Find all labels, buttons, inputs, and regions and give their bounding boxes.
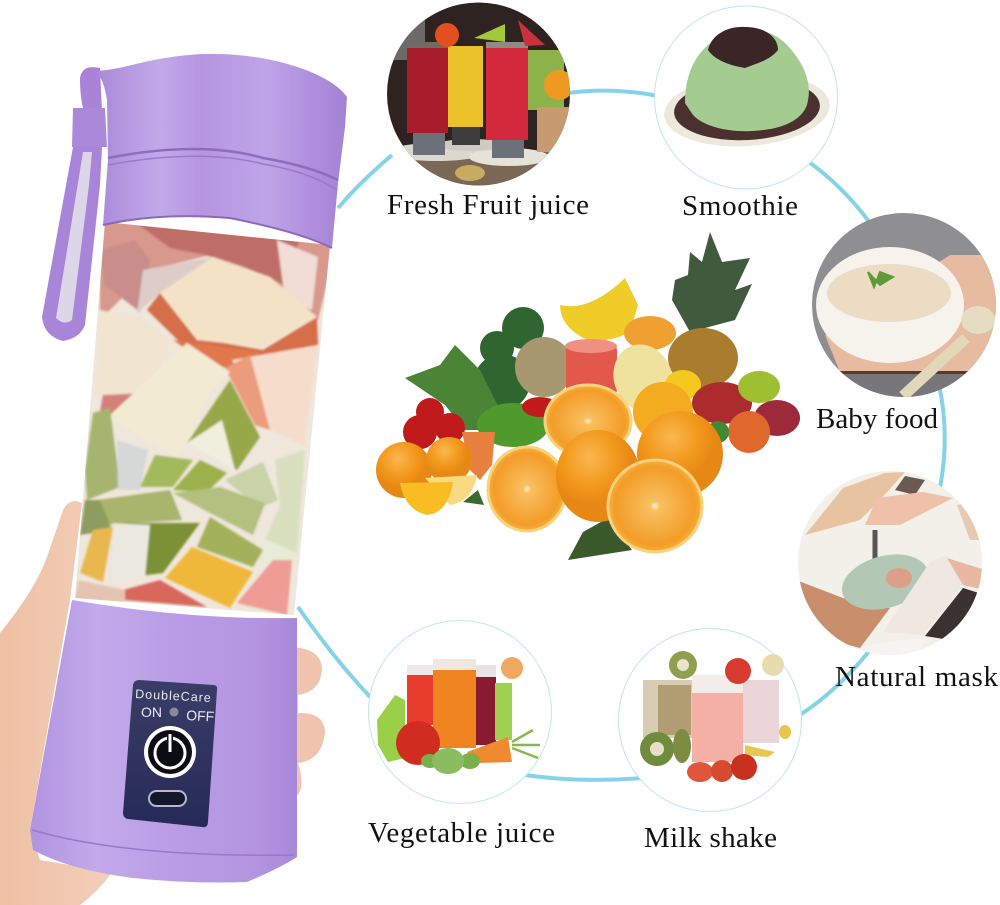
off label: OFF [186,707,215,724]
back orange [633,382,693,442]
green apple [738,371,780,403]
half orange front [608,460,702,552]
photo: baby food [810,210,1000,400]
photo: vegetable juice [368,620,552,804]
grapes [754,400,800,436]
leaf [568,518,632,560]
pineapple [668,232,752,388]
kale [474,307,544,410]
photo: smoothie [654,6,838,189]
icon: usb-c port [149,791,186,806]
hand holding the blender [0,501,325,905]
lime [707,421,729,443]
indicator light [170,708,178,716]
brand label: DoubleCare [135,687,212,705]
carrot greens [405,345,500,430]
strap loop [42,67,107,341]
label: vegetable juice: Vegetable juice [368,817,555,849]
whole orange front [556,430,640,522]
glass cup with fruit [75,215,335,615]
half orange top [545,385,631,457]
small leaf [463,490,484,505]
orange slices [624,316,676,350]
control panel [123,680,217,827]
connecting ring [298,91,945,780]
juice glass [565,339,617,395]
bananas [560,278,638,340]
lemon wedges [400,475,477,515]
yellow melon [604,336,682,420]
label: smoothie: Smoothie [682,190,798,222]
photo: fresh fruit juice [385,0,575,190]
cantaloupe [515,337,573,397]
lid [96,54,347,248]
big orange right [637,411,723,497]
label: milk shake: Milk shake [644,822,777,854]
central fruit pile [376,232,800,560]
photo: milk shake [618,628,802,812]
photo: natural mask [796,470,986,660]
base [30,600,297,882]
label: natural mask: Natural mask [835,661,998,693]
icon: power button [144,726,196,778]
celery [477,403,549,447]
mango [692,382,752,424]
label: fresh fruit juice: Fresh Fruit juice [387,189,589,221]
left oranges [376,437,472,498]
lemon [665,370,701,400]
label: baby food: Baby food [816,403,938,435]
red apple [728,411,770,453]
half orange lower left [488,447,566,531]
tomatoes [403,397,558,449]
blender [30,54,347,882]
on label: ON [141,704,162,720]
carrot [462,432,495,480]
